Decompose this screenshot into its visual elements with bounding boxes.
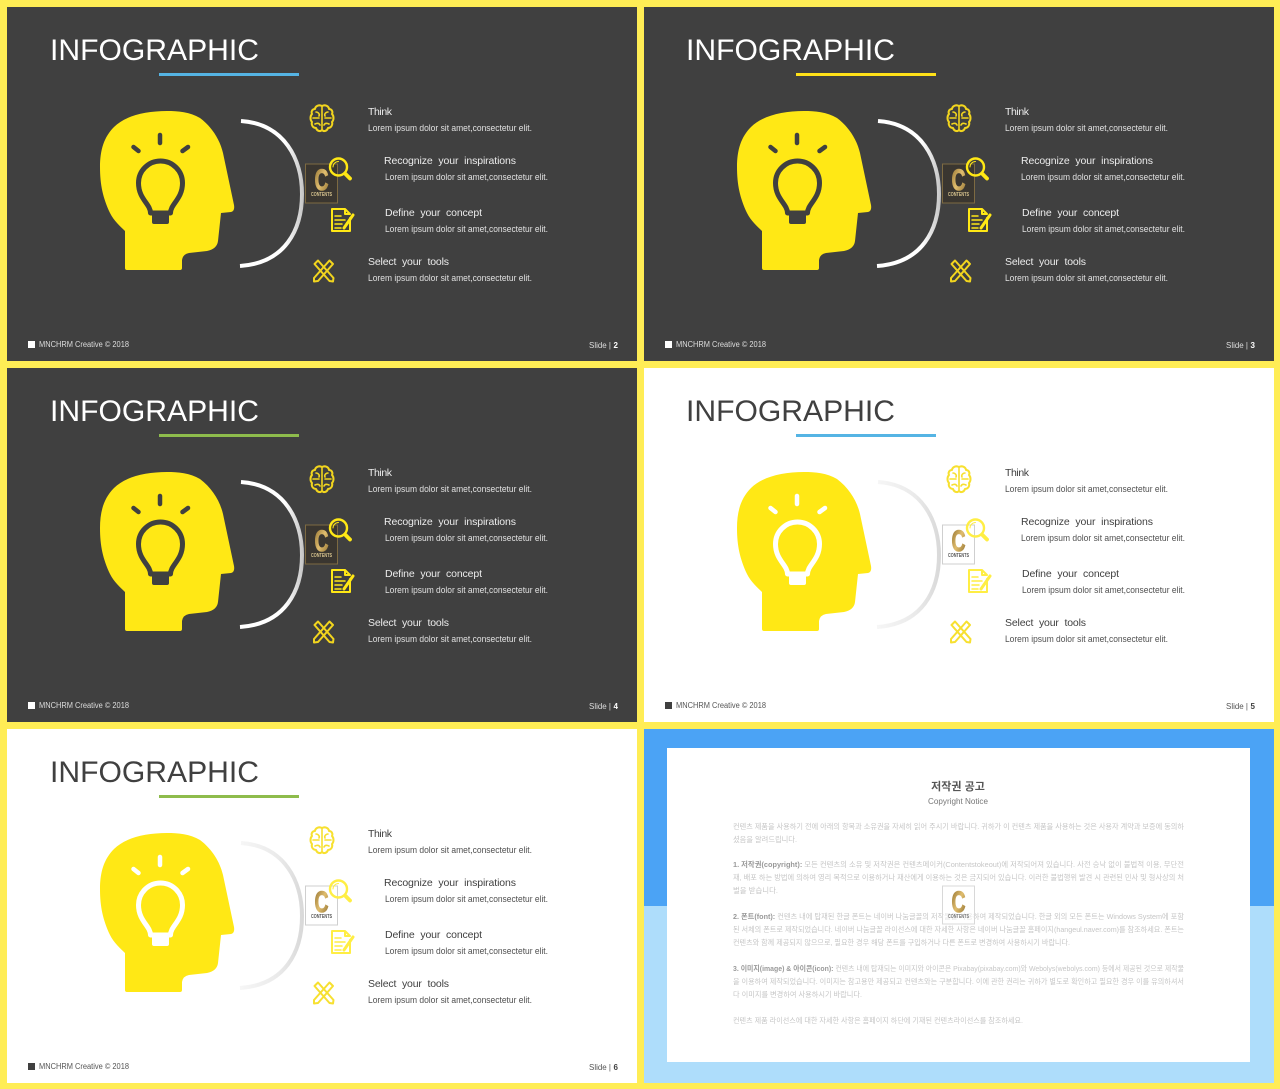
text: recognize: Lorem ipsum dolor sit amet,consectetur elit.: [1021, 172, 1185, 182]
icon: document and pen: [969, 209, 990, 231]
text: select: Select your tools: [1005, 617, 1086, 629]
footer: [665, 701, 1256, 711]
icon: document and pen: [332, 209, 353, 231]
icon: brain: [310, 466, 334, 492]
icon: brain: [310, 827, 334, 853]
text: think: [368, 467, 532, 494]
text: think: [368, 106, 532, 133]
text: think: Lorem ipsum dolor sit amet,consectetur elit.: [368, 484, 532, 494]
text: define: Define your concept: [385, 207, 482, 219]
text: select: Lorem ipsum dolor sit amet,consectetur elit.: [368, 634, 532, 644]
text: define: Lorem ipsum dolor sit amet,consectetur elit.: [385, 946, 548, 956]
logo watermark: [942, 164, 974, 203]
footer: 2: [614, 341, 618, 350]
title: INFOGRAPHIC: [50, 395, 259, 428]
text: think: [1005, 106, 1168, 133]
panel: copyright notice: [644, 729, 1274, 1083]
text: select: [368, 617, 532, 644]
icon: magnifier: [330, 880, 350, 900]
icon: document and pen: [969, 570, 990, 592]
footer: 5: [1250, 702, 1256, 711]
logo watermark: C: [952, 525, 966, 558]
logo watermark: CONTENTS: [311, 914, 333, 920]
text: recognize: Recognize your inspirations: [384, 516, 516, 528]
text: think: Think: [1005, 106, 1030, 118]
logo watermark: [942, 525, 974, 564]
text: recognize: [384, 155, 548, 182]
title underline: [796, 73, 936, 76]
text: define: Define your concept: [1022, 568, 1119, 580]
text: select: [368, 978, 532, 1005]
footer: MNCHRM Creative © 2018: [39, 701, 130, 710]
text: recognize: Recognize your inspirations: [1021, 155, 1153, 167]
text: recognize: Lorem ipsum dolor sit amet,consectetur elit.: [1021, 533, 1185, 543]
footer: [28, 340, 618, 350]
text: define: Lorem ipsum dolor sit amet,consectetur elit.: [1022, 585, 1185, 595]
icon: brain: [310, 105, 334, 131]
text: define: Define your concept: [385, 929, 482, 941]
title underline: [159, 795, 299, 798]
footer: [665, 340, 1256, 350]
footer: Slide |: [1226, 702, 1248, 711]
title underline: [159, 73, 299, 76]
text: think: Lorem ipsum dolor sit amet,consectetur elit.: [368, 123, 532, 133]
footer: MNCHRM Creative © 2018: [39, 340, 130, 349]
icon: crossed pencils: [951, 260, 970, 282]
title: INFOGRAPHIC: [50, 756, 259, 789]
footer: MNCHRM Creative © 2018: [676, 340, 767, 349]
footer: 6: [614, 1063, 618, 1072]
text: think: [368, 828, 532, 855]
icon: magnifier: [967, 520, 987, 540]
logo watermark: C: [314, 886, 328, 919]
arc: [877, 482, 939, 627]
footer: MNCHRM Creative © 2018: [676, 701, 767, 710]
icon: head with light bulb: [100, 833, 234, 992]
text: recognize: Lorem ipsum dolor sit amet,consectetur elit.: [385, 894, 548, 904]
panel: slide 3 dark: [644, 7, 1274, 361]
text: select: Select your tools: [368, 617, 449, 629]
icon: magnifier: [967, 158, 987, 178]
logo watermark: CONTENTS: [311, 192, 333, 198]
text: recognize: [1021, 155, 1185, 182]
icon: document and pen: [332, 931, 353, 953]
footer: [28, 701, 618, 711]
icon: brain: [948, 466, 970, 492]
copyright section 2: [733, 911, 1184, 947]
icon: crossed pencils: [314, 260, 334, 282]
text: think: Lorem ipsum dolor sit amet,consectetur elit.: [368, 845, 532, 855]
text: recognize: Lorem ipsum dolor sit amet,consectetur elit.: [385, 172, 548, 182]
text: select: [368, 256, 532, 283]
text: think: Think: [1005, 467, 1030, 479]
arc: [240, 121, 302, 266]
text: recognize: [1021, 516, 1185, 543]
copyright intro paragraph: 셨음을 알려드립니다.: [733, 834, 797, 844]
title underline: [159, 434, 299, 437]
footer: 3: [1250, 341, 1256, 350]
panel: slide 4 dark: [7, 368, 637, 722]
text: think: Lorem ipsum dolor sit amet,consectetur elit.: [1005, 123, 1168, 133]
text: define: Define your concept: [385, 568, 482, 580]
footer: Slide |: [589, 1063, 611, 1072]
title: INFOGRAPHIC: [686, 34, 895, 67]
text: select: [1005, 256, 1168, 283]
text: define: Lorem ipsum dolor sit amet,consectetur elit.: [385, 224, 548, 234]
text: define: Lorem ipsum dolor sit amet,consectetur elit.: [385, 585, 548, 595]
copyright intro paragraph: 컨텐츠 제품을 사용하기 전에 아래의 항목과 소유권을 자세히 읽어 주시기 바랍니다. 귀하가 이 컨텐츠 제품을 사용하는 것은 사용자 계약과 보증에 동의하: [733, 821, 1184, 831]
footer: [28, 1062, 618, 1072]
icon: magnifier: [330, 158, 350, 178]
copyright section 1: 1. 저작권(copyright): 모든 컨텐츠의 소유 및 저작권은 컨텐츠메이커(Contentstokeout)에 저작되어져 있습니다. 사전 승낙 없이 불법적 이용, 무단전: [733, 859, 1184, 869]
arc: [877, 121, 939, 266]
logo watermark: CONTENTS: [311, 553, 333, 559]
icon: crossed pencils: [314, 982, 334, 1004]
text: define: [385, 207, 548, 234]
text: recognize: Recognize your inspirations: [384, 155, 516, 167]
copyright section 3: 3. 이미지(image) & 아이콘(icon): 컨텐츠 내에 탑재되는 이미지와 아이콘은 Pixabay(pixabay.com)와 Webolys(webolys.com) 등에서 제공된 것으로 제작물: [733, 963, 1184, 973]
logo watermark: C: [314, 525, 328, 558]
icon: brain: [948, 105, 970, 131]
text: think: Think: [368, 106, 393, 118]
logo watermark: C: [952, 886, 966, 919]
title underline: [796, 434, 936, 437]
logo watermark: [306, 164, 338, 203]
icon: head with light bulb: [737, 111, 871, 270]
logo watermark: CONTENTS: [948, 914, 970, 920]
logo watermark: C: [952, 164, 966, 197]
text: define: [1022, 568, 1185, 595]
copyright subheading: Copyright Notice: [928, 797, 989, 806]
text: think: Lorem ipsum dolor sit amet,consectetur elit.: [1005, 484, 1168, 494]
icon: head with light bulb: [737, 472, 871, 631]
text: think: Think: [368, 467, 393, 479]
copyright section 2: 된 서체의 폰트로 제작되었습니다. 네이버 나눔글꼴 라이선스에 대한 자세한 사항은 네이버 나눔글꼴 홈페이지(hangeul.naver.com)를 참조하세요. 폰트는: [733, 924, 1184, 934]
text: define: Lorem ipsum dolor sit amet,consectetur elit.: [1022, 224, 1185, 234]
panel: slide 6 light: [7, 729, 637, 1083]
text: select: Lorem ipsum dolor sit amet,consectetur elit.: [368, 995, 532, 1005]
copyright closing line: 컨텐츠 제품 라이선스에 대한 자세한 사항은 홈페이지 하단에 기재된 컨텐츠라이선스를 참조하세요.: [733, 1015, 1023, 1025]
copyright section 1: [733, 859, 1184, 895]
text: recognize: Recognize your inspirations: [384, 877, 516, 889]
copyright section 3: [733, 963, 1184, 999]
title: INFOGRAPHIC: [50, 34, 259, 67]
icon: head with light bulb: [100, 472, 234, 631]
panel: slide 5 light: [644, 368, 1274, 722]
copyright section 3: 을 이용하여 제작되었습니다. 이미지는 참고용만 제공되고 컨텐츠와는 구분합니다. 이에 관한 권리는 귀하가 별도로 확인하고 필요한 경우 이를 유의하셔서: [733, 976, 1184, 986]
text: recognize: [384, 516, 548, 543]
copyright section 2: 2. 폰트(font): 컨텐츠 내에 탑재된 한글 폰트는 네이버 나눔글꼴의 저작물을 사용하여 제작되었습니다. 한글 외의 모든 폰트는 Windows System에 포함: [733, 911, 1184, 921]
footer: Slide |: [589, 702, 611, 711]
text: select: [1005, 617, 1168, 644]
text: define: [1022, 207, 1185, 234]
copyright heading: 저작권 공고: [931, 779, 985, 793]
text: select: Select your tools: [368, 256, 449, 268]
text: select: Lorem ipsum dolor sit amet,consectetur elit.: [1005, 273, 1168, 283]
icon: magnifier: [330, 520, 350, 540]
logo watermark: CONTENTS: [948, 553, 970, 559]
icon: head with light bulb: [100, 111, 234, 270]
footer: Slide |: [1226, 341, 1248, 350]
copyright section 1: 벌을 받습니다.: [733, 885, 778, 895]
text: select: Lorem ipsum dolor sit amet,consectetur elit.: [1005, 634, 1168, 644]
icon: crossed pencils: [951, 622, 970, 642]
text: think: Think: [368, 828, 393, 840]
text: select: Select your tools: [368, 978, 449, 990]
text: define: Define your concept: [1022, 207, 1119, 219]
panel: slide 2 dark: [7, 7, 637, 361]
text: select: Lorem ipsum dolor sit amet,consectetur elit.: [368, 273, 532, 283]
text: recognize: [384, 877, 548, 904]
icon: document and pen: [332, 570, 353, 592]
footer: MNCHRM Creative © 2018: [39, 1062, 130, 1071]
title: INFOGRAPHIC: [686, 395, 895, 428]
logo watermark: CONTENTS: [948, 192, 970, 198]
logo watermark: [306, 525, 338, 564]
copyright section 1: 재, 배포 하는 방법에 의하여 영리 목적으로 이용하거나 재산에게 이용하는 것은 금지되어 있습니다. 이러한 불법행위 발견 시 관련된 민사 및 형사상의 처: [733, 872, 1184, 882]
footer: Slide |: [589, 341, 611, 350]
logo watermark: [306, 886, 338, 925]
copyright section 3: 다 이미지를 변경하여 사용하시기 바랍니다.: [733, 989, 862, 999]
arc: [240, 482, 302, 627]
logo watermark: C: [314, 164, 328, 197]
logo watermark: [942, 886, 974, 924]
icon: crossed pencils: [314, 622, 334, 642]
copyright intro paragraph: [733, 821, 1184, 844]
text: recognize: Lorem ipsum dolor sit amet,consectetur elit.: [385, 533, 548, 543]
text: define: [385, 568, 548, 595]
text: select: Select your tools: [1005, 256, 1086, 268]
text: define: [385, 929, 548, 956]
text: think: [1005, 467, 1168, 494]
footer: 4: [614, 702, 618, 711]
text: recognize: Recognize your inspirations: [1021, 516, 1153, 528]
arc: [240, 843, 302, 988]
copyright section 2: 컨텐츠와 함께 제공되지 않으므로, 필요한 경우 해당 폰트를 구입하거나 다른 폰트로 변경하여 사용하시기 바랍니다.: [733, 937, 1070, 947]
